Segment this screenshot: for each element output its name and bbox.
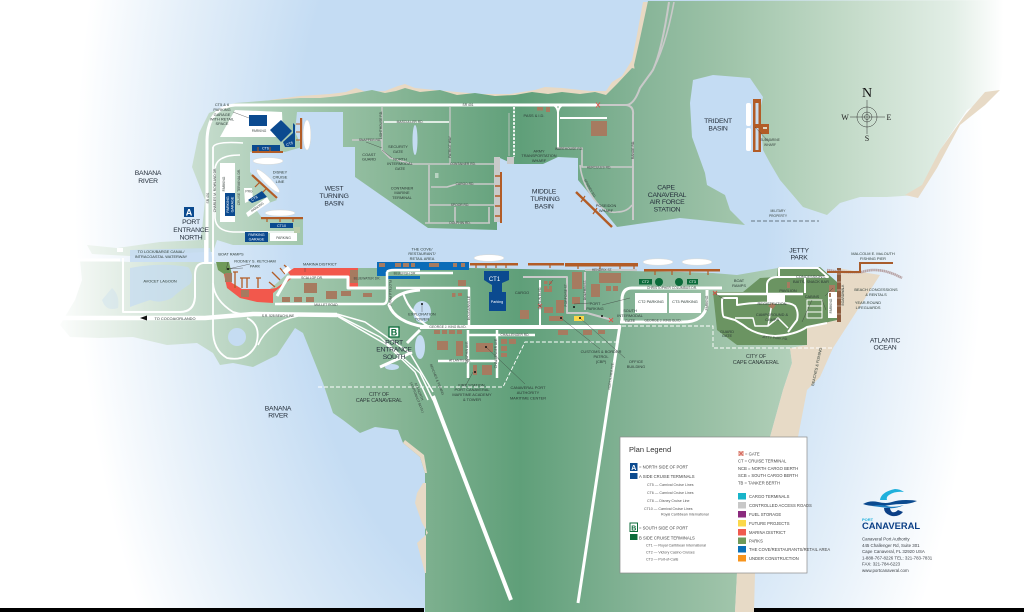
large place labels: NORTH [180,234,203,242]
small map labels: PROPERTY [769,214,788,218]
small map labels: CARGO RD. [456,182,474,186]
large place labels: TURNING [319,193,349,200]
legend: south side of port [630,523,706,562]
small map labels: PAVILION [779,288,797,293]
legend: colour key: CARGO TERMINALS [749,494,790,499]
small map labels: INTERMODAL [617,313,644,318]
contact details: Cape Canaveral, FL 32920 USA [862,549,925,554]
small map labels: INTRACOASTAL WATERWAY [135,254,188,259]
logo: Port Canaveral [862,489,920,531]
small map labels: WHARF [532,158,547,163]
small map labels: TERMINAL [392,195,413,200]
small map labels: TO LOCK/BARGE CANAL/ [138,249,185,254]
small map labels: (CBP) [596,359,607,364]
small map labels: MULLET ROAD [314,303,338,307]
small map labels: NORTH [393,156,407,162]
legend: south side of port: B [631,526,636,532]
terminal labels on map [222,129,294,242]
small map labels: CONTAINER [391,186,414,190]
small map labels: CANAVERAL PORT [511,385,546,390]
logo: Port Canaveral: PORT [862,517,874,522]
legend: colour key: FUEL STORAGE [749,512,781,517]
small map labels: GARAGE [214,112,231,117]
small map labels: MARLIN BLVD. [538,287,542,309]
small map labels: BOUGAINVILLE [467,295,471,320]
large place labels: TURNING [530,196,560,203]
large place labels: PORT [182,219,200,226]
large place labels: ATLANTIC [870,338,901,344]
small map labels: EXPLORATION [408,312,436,316]
large place labels [135,118,901,420]
small map labels: MARINE [394,190,410,195]
small map labels: CARGO [515,290,529,295]
small map labels: SR 401 [462,103,474,107]
small map labels: RANGE RD. [631,141,635,159]
small map labels: PARK [250,264,261,268]
small map labels: GATE [393,149,404,154]
terminal labels on map: PARKING [226,196,230,213]
small map labels: RETAIL AREA [410,256,435,261]
small map labels: BOARDWALK [841,284,845,305]
large place labels: CAPE [657,184,675,192]
legend: north side of port: A SIDE CRUISE TERMINALS [639,474,695,479]
terminal labels on map: PARKING [248,233,265,237]
small map labels: SNAPPER RD. [359,138,381,142]
east beach [735,268,880,612]
large place labels: RIVER [268,412,288,420]
small map labels: WHARF [764,143,776,147]
large place labels: WEST [325,186,343,192]
gate markers [538,102,717,322]
large place labels: CAPE CANAVERAL [733,360,779,366]
compass rose: N [862,86,872,101]
north shoreline land strip [235,68,640,112]
legend: north side of port: A [631,465,636,472]
Trident submarine wharf [746,99,769,152]
legend title: Plan Legend [629,445,671,454]
legend: north side of port: CT8 — Disney Cruise Line [647,499,690,503]
CT1 parking and terminal [484,271,509,311]
terminal labels on map: PARKING [252,129,267,133]
legend: colour key: MARINA DISTRICT [749,530,786,535]
canal and lagoon water [102,125,431,370]
terminal labels on map: PARKING [222,176,226,191]
small map labels: BLUEFISH DR. [394,272,416,276]
A side cruise terminals [220,110,311,242]
small map labels: GATE [625,318,636,323]
small map labels: WHARF [599,208,614,213]
small map labels: ARMY [533,148,545,154]
large place labels: ENTRANCE [376,346,412,354]
small map labels: RESTAURANT/ [408,251,436,256]
large place labels: BANANA [265,406,292,412]
small map labels: SPOOR RD. [451,203,469,207]
small map labels: GATE [722,333,733,338]
CT2 CT3 parking and tags [635,278,701,313]
compass rose: S [865,134,869,143]
small map labels: AVOCET LAGOON [143,278,177,284]
legend: north side of port: = NORTH SIDE OF PORT [639,464,688,470]
small map labels: PORT CANAVERAL [454,387,490,392]
small map labels: BLUEWATER DR. [354,276,380,280]
north land: Cape Canaveral Air Force Station [192,0,1016,252]
legend: abbreviations: NCB = NORTH CARGO BERTH [738,466,798,471]
south channel piers and ships [470,172,720,275]
small map labels: FLOTILLA PKWY [388,280,392,307]
small map labels: MARITIME ACADEMY [452,392,492,397]
small map labels: OFFICE [629,359,644,364]
legend: abbreviations: = GATE [745,452,760,456]
small map labels: CRUISE [273,174,288,180]
port entrance B badge [389,327,399,338]
small map labels: GUARD [720,329,734,334]
small map labels: RODNEY S. KETCHAM [234,258,276,264]
large place labels: CITY OF [746,354,767,360]
small map labels: S.R. 528 BEACHLINE [262,314,295,318]
small map labels: COAST [362,152,376,157]
legend: south side of port: CT1 — Royal Caribbean International [646,544,706,548]
buildings [225,107,621,375]
contact details [862,536,933,573]
small map labels: CONTAINER RD. [450,162,476,166]
compass rose: W [841,113,849,122]
small map labels: LIGHTHOUSE RD. [379,111,383,139]
large place labels: PORT [385,340,403,346]
small map labels: MILITARY [771,209,786,213]
small map labels: PARKING [213,107,231,112]
Jetty Park land [713,267,837,345]
small map labels: GATE [395,166,406,171]
large place labels: CAPE CANAVERAL [356,398,402,404]
legend: colour key [738,493,830,562]
port entrance A badge: A [186,208,193,218]
panel: plan legend [620,437,830,573]
small map labels: BEACHES & FISHING [429,363,445,396]
legend: north side of port: CT6 — Carnival Cruise Lines [647,491,694,495]
large place labels: BANANA [135,170,162,177]
small map labels: HENDRIX ST. [592,268,612,272]
small map labels: MARITIME CENTER [510,396,546,400]
CT1 parking and terminal: CT1 [489,277,501,283]
small map labels: DISNEY [273,170,288,174]
small map labels: BOAT [734,278,745,283]
large place labels: TRIDENT [704,118,732,125]
city limit dashed lines [318,221,833,387]
large place labels: BASIN [534,204,554,210]
small map labels: GUARD [362,156,376,162]
road network: controlled access grey roads [352,2,674,320]
large place labels: JETTY [789,248,809,254]
large place labels: ENTRANCE [173,227,209,234]
small map labels: CHRISTOPHER COLUMBUS DR. [647,286,697,290]
small map labels: PORT [590,301,601,306]
small map labels: PARKING [829,298,833,313]
legend: south side of port: B SIDE CRUISE TERMINALS [639,536,695,540]
small map labels: SOUTH [623,308,637,313]
north shoreline beach [270,2,650,106]
logo: Port Canaveral: CANAVERAL [862,520,920,531]
small map labels: HERCULES RD. [587,166,611,170]
small map labels: BAITS, SNACK BAR [793,279,829,284]
small map labels: WAREHOUSE RD. [555,147,583,151]
small map labels: LINE [276,179,285,184]
large place labels: SOUTH [383,354,406,361]
CT2 CT3 parking and tags: CT2 PARKING [638,299,664,304]
small map labels: JETTY PARK RD. [762,335,788,341]
small map labels: MASCULLER RD. [397,120,423,124]
large place labels: PARK [790,254,808,262]
small map labels: NORTH ARM AVE. [607,362,615,390]
terminal labels on map: PARKING [276,236,291,240]
small map labels: SCALLOP DR. [301,276,323,280]
The Cove restaurants and retail area [377,262,469,279]
small map labels: FISHING PIER [860,256,886,261]
large place labels: RIVER [138,178,158,185]
small map labels: TO COCOA/ORLANDO [154,316,196,321]
contact details: Canaveral Port Authority [862,536,910,542]
small map labels: PASS & I.D. [524,113,544,118]
port entrance A badge [184,207,194,218]
small map labels: CAMPGROUND & [756,312,789,317]
small map labels: (ASTRONAUT BLVD.) [409,382,425,414]
small map labels: MALCOLM E. McLOUTH [851,251,895,256]
contact details: FAX: 321-784-6223 [862,562,901,566]
small map labels: BOAT RAMPS [218,252,244,256]
small map labels: DOLPHIN ST. [583,280,587,300]
south land: Port and Cape Canaveral [60,260,837,612]
marina district [222,268,358,303]
legend: abbreviations [738,451,798,486]
terminal labels on map: GARAGE [230,196,234,212]
large place labels: AIR FORCE [650,199,685,206]
leader lines and pointers [140,112,833,385]
small map labels: BUILDING [627,364,645,369]
terminal labels on map: GARAGE [249,238,265,242]
terminal labels on map: PARKING [250,201,265,213]
terminal labels on map: CT10 [277,224,286,228]
legend: colour key: PARKS [749,538,763,544]
port entrance B badge: B [391,328,398,338]
small map labels: PATRIOT WAY [448,135,452,158]
small map labels: INTERMODAL [387,161,414,166]
small map labels: CONCESSIONS, [796,274,826,279]
large place labels: BASIN [324,200,344,208]
parks: Rodney S. Ketcham Park [216,262,232,275]
small map labels: WITH RETAIL [210,116,235,122]
bottom black edge [0,608,1024,612]
large place labels: OCEAN [874,344,897,352]
legend: colour key: FUTURE PROJECTS [749,521,790,526]
CT2 CT3 parking and tags: CT3 [689,280,696,284]
legend: south side of port: = SOUTH SIDE OF PORT [639,526,688,530]
small map labels: TOWER [415,316,429,322]
small map labels: CRUISE TERMINAL DR. [237,169,241,205]
small map labels: SPINNEY RD. [583,178,597,199]
small map labels: BEACH CONCESSIONS [854,287,898,292]
terminal labels on map: PRG [245,190,253,194]
small map labels: TRANSPORTATION [521,153,557,158]
small map labels: REGISTRATION [758,301,787,306]
small map labels: DOLPHIN AVE. [465,341,469,363]
CT2 CT3 parking and tags: CT2 [642,280,649,284]
north-east beach [905,90,1000,198]
Jetty Park roads and facilities [717,263,902,336]
small map labels: PARKING [586,306,604,311]
small map labels: AUTHORITY [517,390,540,395]
small map labels: PARKING [705,295,709,310]
marina piers [233,265,291,288]
small map labels: PORPOISE ST. [564,283,568,306]
small map labels: RAMPS [732,283,746,288]
large place labels: CITY OF [369,392,390,398]
small map labels: SUBMARINE [760,138,781,142]
road network: white roads [0,105,722,603]
legend: south side of port: CT2 — Victory Casino Cruises [646,550,695,554]
legend: colour key: CONTROLLED ACCESS ROADS [749,503,812,508]
small map labels: CHALLENGER RD. [501,333,530,337]
small map labels: GEORGE J. KING BLVD. [429,325,467,329]
small map labels: CHARLES M. ROWLAND DR. [213,168,217,212]
legend: abbreviations: SCB = SOUTH CARGO BERTH [738,473,798,478]
legend: colour key: UNDER CONSTRUCTION [749,556,799,561]
small map labels: & RENTALS [865,292,887,297]
small map labels: PATROL [594,354,609,359]
small map labels: A1A NORTH [414,382,424,402]
contact details: www.portcanaveral.com [862,568,909,573]
large place labels: BASIN [708,126,728,132]
small map labels: SECURITY [388,144,408,149]
CT1 parking and terminal: Parking [491,300,503,304]
small map labels: FIRE STATION, [458,382,486,388]
small map labels: POSEIDON [596,203,616,208]
small map labels: MARINA DISTRICT [303,262,338,266]
terminal labels on map: CT5 [286,141,294,147]
west pale land finger [87,240,205,256]
large place labels: STATION [654,206,681,214]
legend: north side of port: CT5 — Carnival Cruise Lines [647,483,694,487]
large place labels: CANAVERAL [648,192,687,199]
contact details: 1-888-767-8226 TEL: 321-783-7831 [862,556,933,560]
legend: colour key: THE COVE/RESTAURANTS/RETAIL AREA [749,547,830,552]
small map labels: SPACE [216,121,229,126]
small map labels: CHALLENGER AVE. [494,338,498,368]
small map labels: & TOWER [463,397,481,402]
legend: abbreviations: TB = TANKER BERTH [738,480,780,486]
CT2 CT3 parking and tags: CT3 PARKING [672,299,698,304]
small map labels: YEAR-ROUND [855,300,881,305]
small map labels: THE COVE/ [412,246,433,252]
legend: north side of port: Royal Caribbean International [661,512,709,516]
contact details: 445 Challenger Rd, Suite 301 [862,543,920,548]
compass rose: E [887,113,892,122]
legend: north side of port [630,463,709,516]
small map labels: CAMPS [765,317,779,322]
small map labels: CUSTOMS & BORDER [581,349,622,354]
small map labels: BEACHES & FISHING [810,347,823,386]
compass rose [841,86,892,143]
legend: south side of port: CT3 — Port-of-Calls [646,558,679,562]
small map labels: DOLPHIN RD. [449,221,471,225]
small map labels: SR 401 [206,192,210,204]
large place labels: MIDDLE [532,188,557,196]
small map labels: CT5 & 6 [215,102,229,107]
small map labels [135,102,898,414]
terminal labels on map: CT8 [250,195,259,202]
terminal labels on map: CT6 [262,146,269,150]
small map labels: GEORGE J. KING BLVD. [644,318,682,322]
west shore beach [403,440,428,573]
small map labels: CABINS [805,294,820,299]
small map labels: ATLANTIS RD. [449,358,471,362]
legend: north side of port: CT10 — Carnival Cruise Lines [644,507,693,511]
legend: abbreviations: CT = CRUISE TERMINAL [738,458,787,464]
small map labels: LIFEGUARDS [856,305,881,310]
